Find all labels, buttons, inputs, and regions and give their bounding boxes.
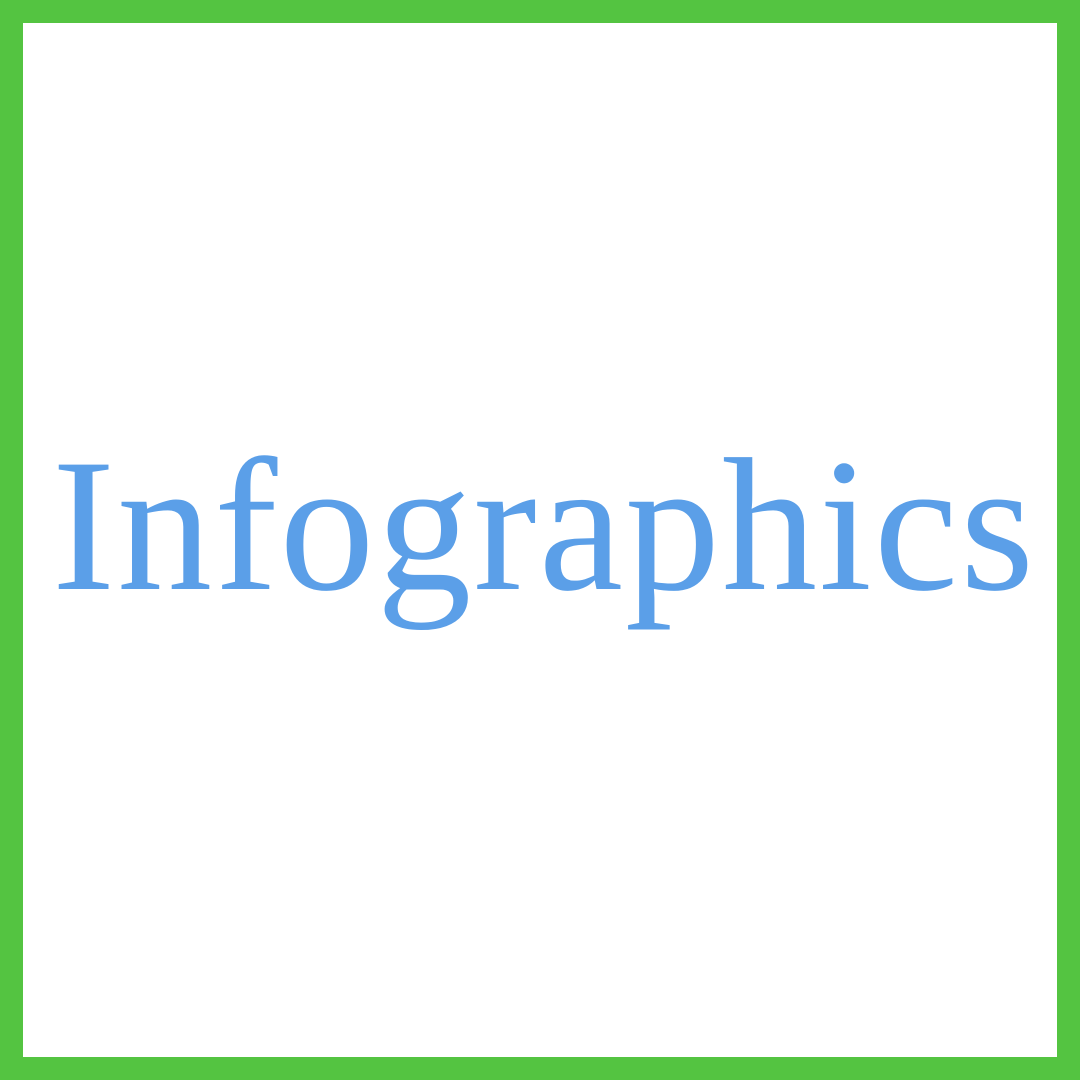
title: Infographics (52, 421, 1036, 631)
